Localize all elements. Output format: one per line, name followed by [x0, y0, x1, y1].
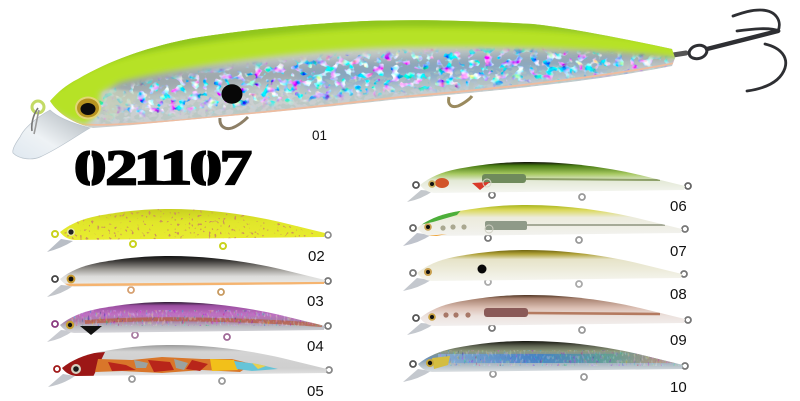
lip: [47, 239, 73, 252]
lure 10: dark back iridescent: [403, 341, 688, 382]
lure 06: green translucent: [407, 162, 691, 202]
belly eyelet front: [220, 117, 248, 129]
stencil gaps: [90, 147, 208, 187]
label 03: 03: [307, 293, 324, 310]
lure 05: red head holographic: [48, 345, 332, 387]
lure 02: yellow speckled: [47, 206, 331, 252]
label 04: 04: [307, 338, 324, 355]
green back: [50, 20, 675, 126]
eye: [75, 96, 101, 120]
lure 03: black back silver: [47, 256, 331, 297]
gill plate highlight: [102, 89, 140, 122]
lure 08: olive back pearl: [403, 250, 687, 291]
lure 09: brown translucent: [407, 295, 691, 335]
body: [60, 209, 325, 240]
label 02: 02: [308, 248, 325, 265]
black spot: [222, 84, 242, 104]
belly eyelet rear: [449, 96, 472, 107]
nose eyelet: [32, 101, 44, 134]
label 06: 06: [670, 198, 687, 215]
lure 07: yellow-green translucent: [403, 205, 688, 246]
label 05: 05: [307, 383, 324, 400]
lure body: [50, 20, 675, 128]
label 01: 01: [312, 128, 327, 143]
label 09: 09: [670, 332, 687, 349]
clear diving lip: [13, 110, 90, 159]
eyelets: [52, 231, 226, 249]
label 07: 07: [670, 243, 687, 260]
label 08: 08: [670, 286, 687, 303]
treble hook: [673, 10, 786, 91]
label 10: 10: [670, 379, 687, 396]
lure 04: purple holographic: [47, 302, 331, 342]
black spot: [478, 264, 486, 274]
model number heading: 021107: [74, 139, 252, 195]
lure 01: large chartreuse holographic minnow: [13, 6, 786, 159]
